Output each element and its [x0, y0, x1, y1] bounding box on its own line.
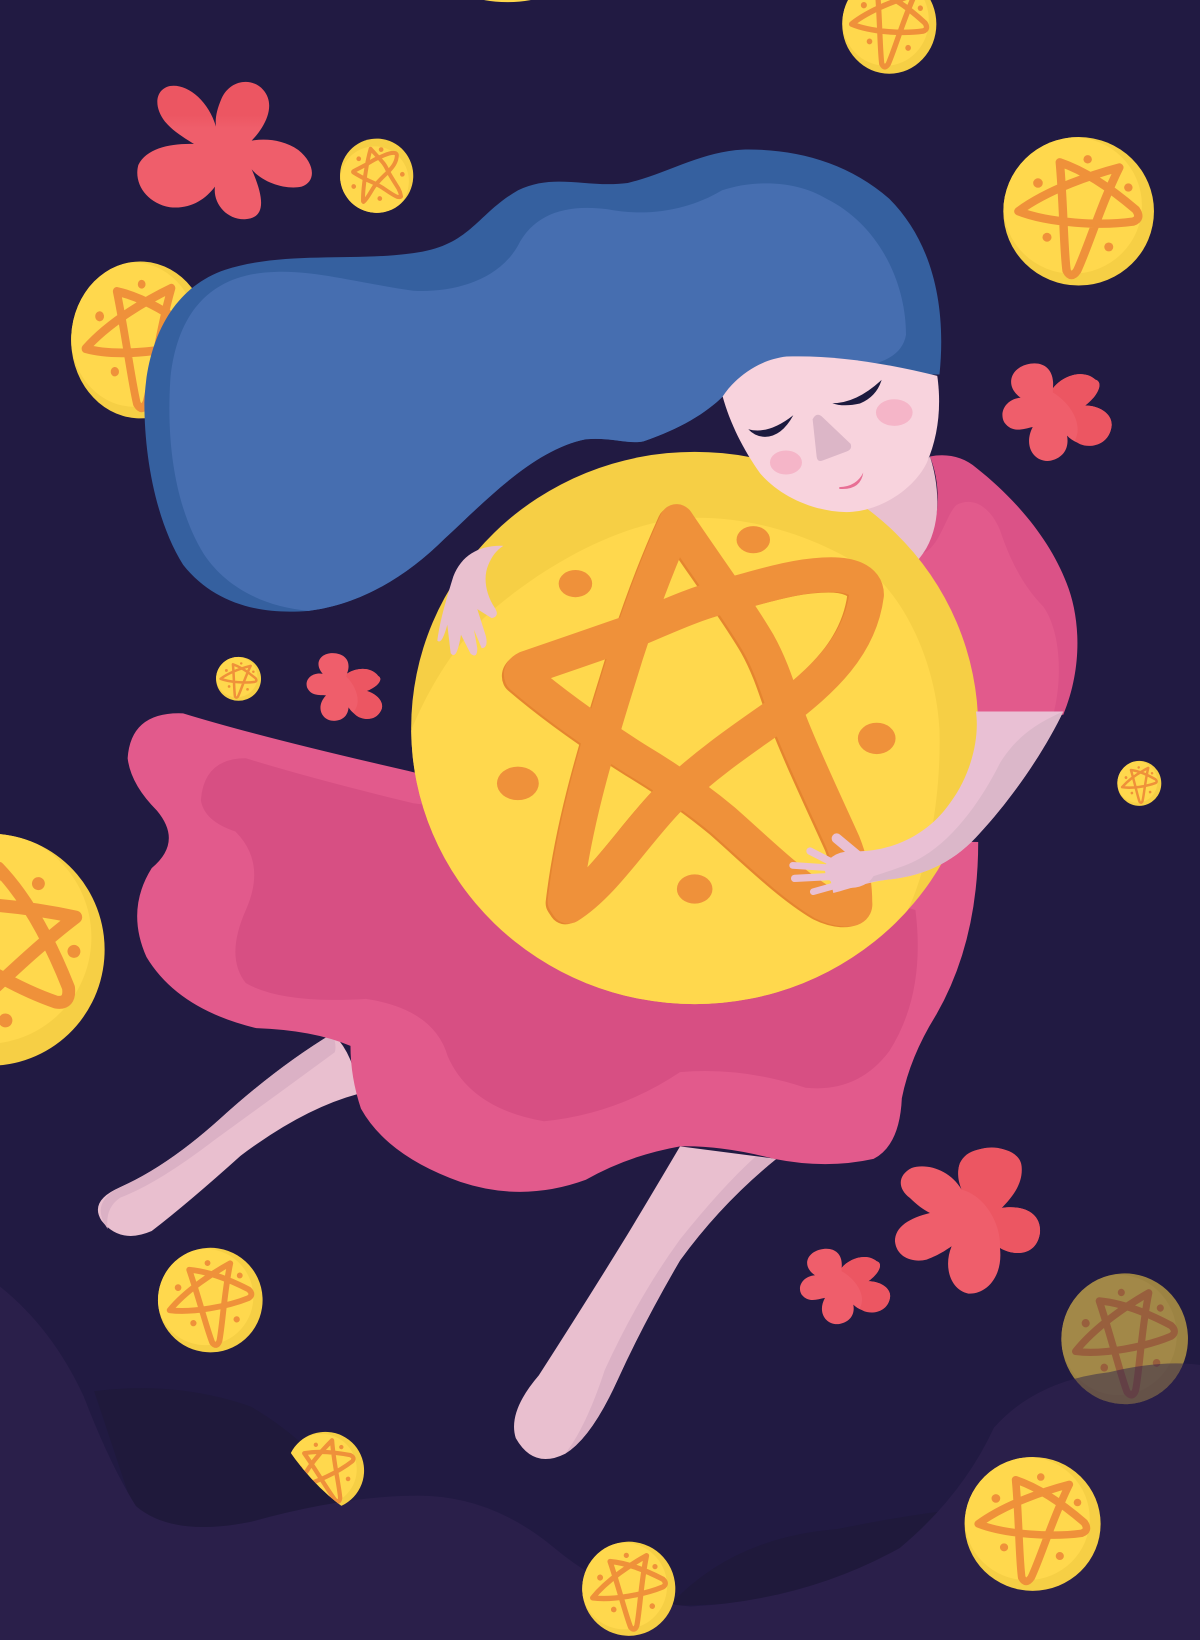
coin: behind hair	[62, 251, 218, 429]
cheeks	[876, 399, 913, 426]
dress skirt	[128, 713, 978, 1192]
large star coin	[403, 452, 978, 1023]
flower: right	[1002, 363, 1112, 461]
fingers	[793, 838, 858, 892]
flower: lower right	[895, 1147, 1040, 1294]
background shadow shapes	[94, 1388, 942, 1605]
coin: bottom centre	[572, 1532, 685, 1640]
coin: partly hidden	[291, 1432, 364, 1506]
back leg	[98, 1033, 358, 1236]
coin: mid right tiny	[1113, 757, 1165, 810]
right arm and hand	[793, 711, 1063, 893]
star outline	[518, 522, 867, 911]
left hand on coin	[437, 546, 503, 656]
coin: top edge	[476, 0, 539, 2]
face	[723, 356, 939, 512]
coin: faded lower right	[1061, 1273, 1188, 1404]
sleeve	[900, 455, 1077, 715]
nose	[813, 415, 851, 461]
coin: upper right large	[1003, 137, 1154, 286]
eyes	[748, 415, 793, 437]
flower: upper left	[137, 82, 312, 219]
front leg	[514, 1146, 776, 1459]
flower: lower centre small	[800, 1249, 890, 1324]
hair	[144, 150, 941, 612]
coin: lower left	[147, 1237, 274, 1363]
coin: left edge large	[0, 794, 144, 1106]
coin: bottom right	[965, 1457, 1101, 1591]
background hills	[0, 1286, 1200, 1640]
coin: top right small	[842, 0, 936, 74]
coin: upper left small	[335, 134, 418, 221]
neck	[847, 457, 937, 566]
coin: mid left tiny	[216, 657, 261, 701]
smile	[839, 473, 863, 489]
coin dots	[497, 526, 896, 904]
flower: mid left small	[299, 648, 393, 732]
